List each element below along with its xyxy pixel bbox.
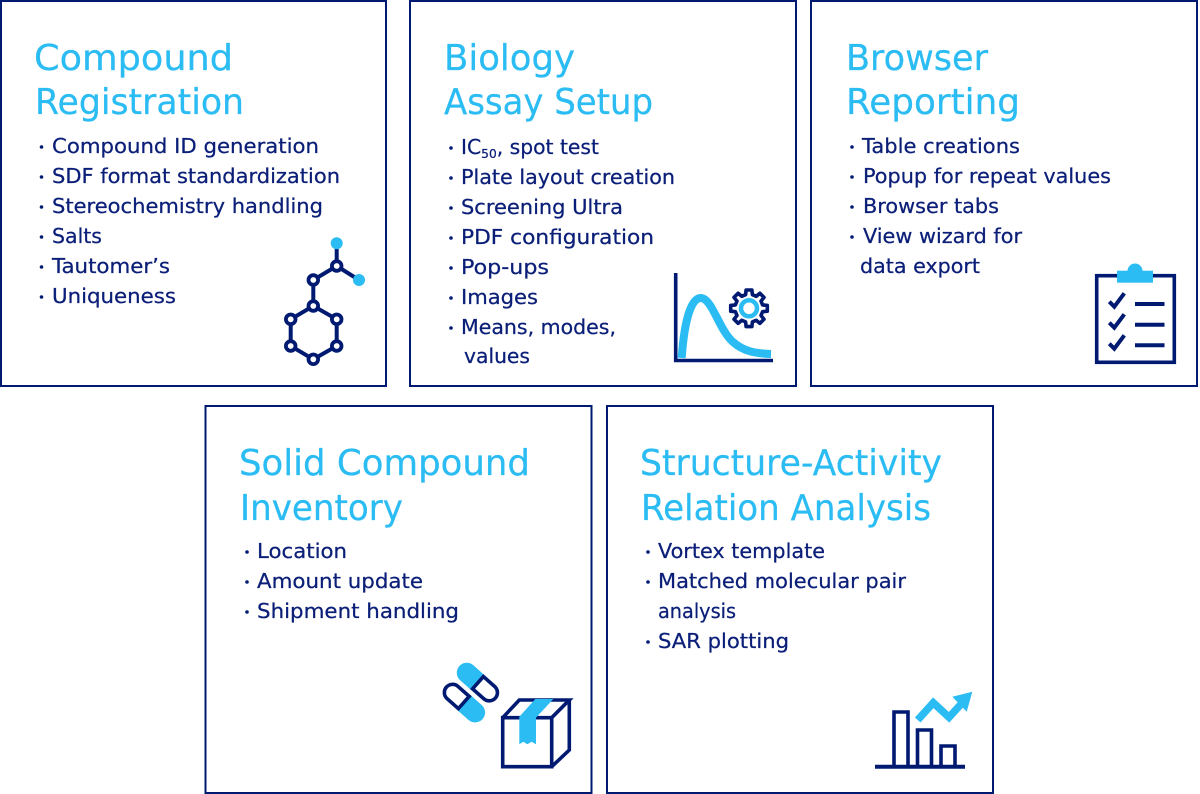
list: biology assay features: Plate layout creation	[461, 165, 675, 189]
icon: curve chart with gear	[676, 273, 773, 360]
heading: structure-activity relation analysis	[640, 443, 942, 529]
icon: bar chart with rising arrow	[875, 692, 972, 767]
list: structure-activity features: SAR plotting	[658, 629, 789, 653]
list: structure-activity features: analysis	[658, 599, 736, 623]
list: inventory features	[245, 539, 459, 623]
panel: compound registration	[1, 1, 386, 386]
list: browser reporting features: Popup for repeat values	[863, 164, 1111, 188]
heading: structure-activity relation analysis: Relation Analysis	[641, 488, 931, 529]
heading: browser reporting	[846, 38, 1020, 123]
heading: solid compound inventory: Inventory	[240, 488, 403, 529]
list: compound registration features: Compound ID generation	[52, 134, 319, 158]
heading: browser reporting: Reporting	[846, 82, 1020, 123]
list: biology assay features: PDF configuration	[461, 225, 654, 249]
list: biology assay features: Means, modes,	[461, 315, 616, 339]
heading: compound registration	[34, 38, 244, 123]
list: biology assay features: , spot test	[497, 135, 599, 159]
list: compound registration features: Uniqueness	[52, 284, 176, 308]
heading: compound registration: Compound	[34, 38, 233, 79]
heading: biology assay setup	[444, 38, 653, 123]
list: compound registration features	[40, 134, 340, 308]
list: browser reporting features	[850, 134, 1111, 278]
list: biology assay features: Pop-ups	[461, 255, 549, 279]
list: browser reporting features: View wizard for	[863, 224, 1023, 248]
list: biology assay features: values	[464, 344, 530, 368]
list: biology assay features: 50	[481, 147, 497, 161]
icon: capsules and box	[440, 659, 569, 767]
list: browser reporting features: data export	[860, 254, 980, 278]
list: biology assay features: Screening Ultra	[461, 195, 623, 219]
list: compound registration features: Tautomer’s	[51, 254, 170, 278]
list: biology assay features: IC	[461, 135, 481, 159]
list: browser reporting features: Browser tabs	[863, 194, 999, 218]
icon: molecule	[286, 237, 365, 364]
list: inventory features: Amount update	[257, 569, 423, 593]
panel: browser reporting	[811, 1, 1197, 386]
panel: biology assay setup	[410, 1, 796, 386]
list: structure-activity features	[646, 539, 907, 653]
heading: compound registration: Registration	[35, 82, 244, 123]
list: inventory features: Location	[257, 539, 347, 563]
list: structure-activity features: Vortex template	[658, 539, 825, 563]
heading: biology assay setup: Assay Setup	[444, 82, 653, 123]
panel: structure-activity relation analysis	[607, 406, 993, 793]
heading: biology assay setup: Biology	[444, 38, 575, 79]
list: inventory features: Shipment handling	[257, 599, 459, 623]
panel: solid compound inventory	[206, 406, 592, 793]
list: compound registration features: SDF format standardization	[52, 164, 340, 188]
heading: structure-activity relation analysis: Structure-Activity	[640, 443, 942, 484]
heading: solid compound inventory: Solid Compound	[239, 443, 530, 484]
list: structure-activity features: Matched molecular pair	[658, 569, 907, 593]
list: biology assay features	[449, 135, 675, 368]
list: browser reporting features: Table creations	[861, 134, 1020, 158]
list: compound registration features: Stereochemistry handling	[52, 194, 323, 218]
heading: browser reporting: Browser	[846, 38, 988, 79]
heading: solid compound inventory	[239, 443, 530, 529]
list: compound registration features: Salts	[52, 224, 102, 248]
icon: clipboard checklist	[1097, 264, 1174, 362]
list: biology assay features: Images	[461, 285, 538, 309]
